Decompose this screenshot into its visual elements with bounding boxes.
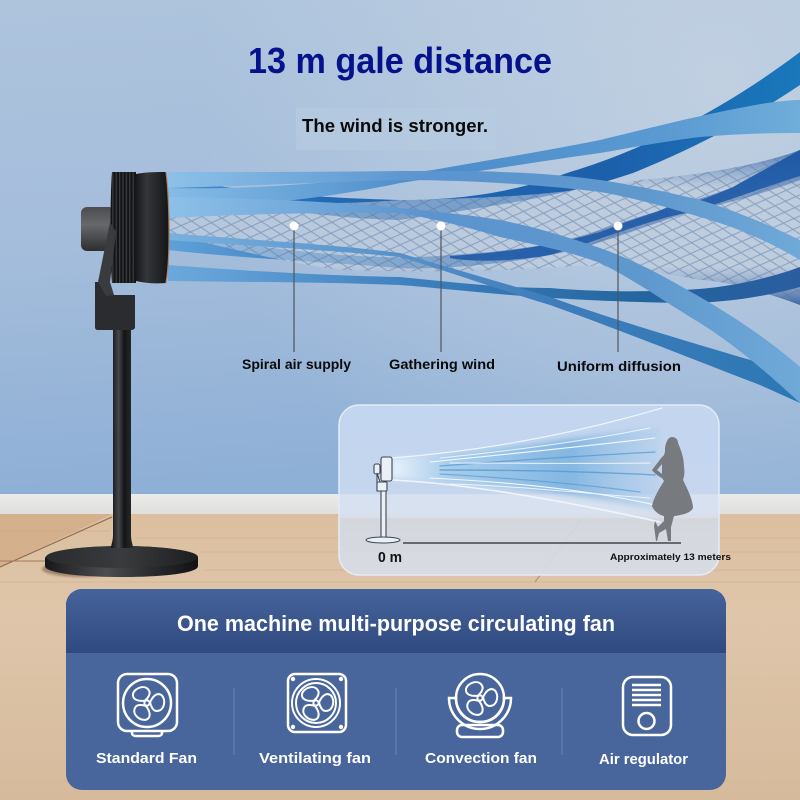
icon: convection fan (449, 674, 511, 737)
ribbon: large upper arc (168, 171, 800, 260)
wind ribbons and mesh (168, 52, 800, 403)
label: ventilating fan: Ventilating fan (259, 750, 371, 767)
fan arm (98, 222, 116, 296)
panel header (66, 589, 726, 653)
panel body (66, 589, 726, 790)
subtitle: The wind is stronger. (302, 116, 488, 136)
ribbon: navy middle band (168, 150, 800, 268)
distance baseline (403, 542, 681, 544)
fan rear fins (110, 172, 136, 283)
fan joint (95, 282, 135, 330)
wall background (0, 0, 800, 496)
icon: air regulator (623, 677, 671, 735)
fan base (45, 546, 198, 577)
ribbon: top dark band (168, 52, 800, 220)
skirting board (0, 494, 800, 514)
icon: ventilating fan (288, 674, 346, 732)
product: standing fan (42, 172, 198, 577)
inset: 13 m distance diagram (339, 405, 731, 575)
label: 0 m: 0 m (378, 550, 402, 566)
ribbon: large lower arc (168, 197, 800, 403)
callout: spiral air supply: Spiral air supply (242, 356, 351, 372)
ribbon: navy front streak (450, 150, 800, 261)
wind mesh (168, 150, 800, 305)
callout: uniform diffusion (557, 222, 681, 374)
fan head body (134, 172, 169, 283)
label: standard fan: Standard Fan (96, 750, 197, 767)
callout: spiral air supply (242, 222, 351, 372)
wind cone (392, 408, 662, 522)
ribbon: lower dark band (168, 265, 800, 303)
icon: standard fan (118, 674, 177, 736)
title: 13 m gale distance (248, 40, 552, 81)
fan pole (111, 328, 133, 548)
callout: gathering wind (389, 222, 495, 372)
label: approximately 13 meters: Approximately 13 meters (610, 552, 731, 562)
wood floor (0, 514, 800, 800)
label: convection fan: Convection fan (425, 750, 537, 767)
callout: uniform diffusion: Uniform diffusion (557, 358, 681, 374)
subtitle (296, 108, 496, 150)
fan base shadow (42, 561, 118, 577)
panel heading: One machine multi-purpose circulating fan (177, 611, 615, 636)
callout: gathering wind: Gathering wind (389, 356, 495, 372)
woman silhouette (652, 437, 693, 541)
label: air regulator: Air regulator (599, 751, 688, 768)
ribbon: top light band (168, 100, 800, 210)
fan motor (81, 207, 115, 251)
panel: uses (66, 589, 726, 790)
ribbon: lower mid band (168, 233, 800, 403)
mini fan outline (366, 457, 400, 543)
